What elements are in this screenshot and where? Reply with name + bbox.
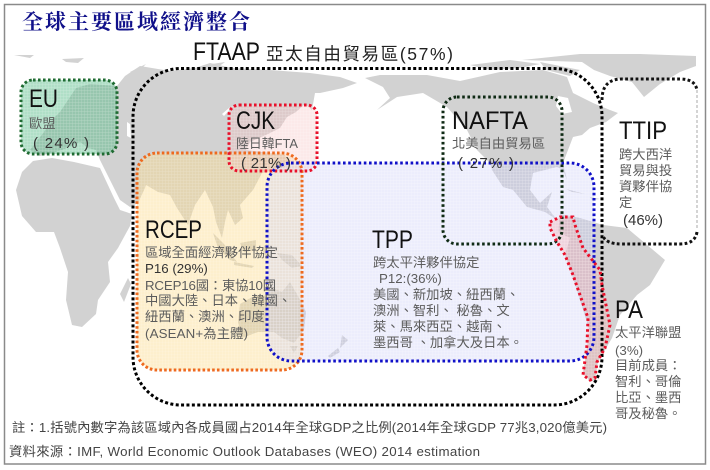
label: PA: 哥及秘魯。	[615, 406, 681, 421]
label: CJK: 陸日韓FTA	[236, 136, 298, 151]
title: 全球主要區域經濟整合	[22, 10, 250, 34]
heading: FTAAP: FTAAP	[193, 38, 260, 66]
fill: PA	[550, 217, 610, 380]
map: Southeast Asian islands	[213, 233, 302, 268]
region fills	[21, 80, 610, 380]
label: RCEP: P16 (29%)	[145, 261, 208, 276]
label: RCEP	[145, 216, 291, 341]
map: small arctic islands	[14, 55, 225, 74]
fill: RCEP	[137, 153, 302, 370]
label: TPP: P12:(36%)	[379, 271, 442, 286]
label: PA: 太平洋聯盟	[615, 325, 681, 340]
label: TTIP: (46%)	[623, 212, 663, 229]
region outlines	[21, 68, 697, 405]
map: Greenland	[522, 54, 696, 97]
map: North America	[365, 70, 618, 220]
label: TTIP: 貿易與投	[619, 163, 672, 178]
label: TTIP: 資夥伴協	[619, 179, 672, 194]
map: Madagascar	[120, 278, 131, 302]
label: RCEP: RCEP16國：東協10國	[145, 278, 276, 293]
outline: TTIP	[602, 79, 697, 244]
label: RCEP: 區域全面經濟夥伴協定	[145, 245, 278, 260]
label: CJK: ( 21% )	[241, 155, 291, 172]
map: Caribbean islands	[566, 189, 600, 200]
label: CJK	[236, 107, 298, 172]
label: NAFTA	[452, 107, 545, 172]
fill: EU	[21, 80, 117, 154]
label: RCEP: 紐西蘭、澳洲、印度	[145, 309, 265, 324]
label: TPP: 美國、新加坡、紐西蘭、	[373, 287, 519, 302]
label: EU: ( 24% )	[33, 135, 89, 152]
label: RCEP: RCEP	[145, 216, 202, 244]
map: inland lakes and seas	[127, 106, 233, 138]
fill: CJK	[229, 105, 317, 171]
label: TTIP: 跨大西洋	[619, 147, 672, 162]
outline: PA	[550, 217, 610, 380]
label: TPP: 萊、馬來西亞、越南、	[373, 319, 506, 334]
outline: NAFTA	[443, 97, 562, 244]
label: PA: PA	[615, 296, 643, 324]
map: Eurasia	[30, 63, 357, 238]
label: CJK: CJK	[236, 107, 275, 135]
map: Arctic Canada	[470, 60, 580, 76]
label: NAFTA: ( 27% )	[458, 155, 514, 172]
label: EU	[29, 85, 89, 152]
label: TPP: TPP	[372, 226, 413, 254]
outline: FTAAP	[133, 68, 602, 405]
label: TPP: 澳洲、智利、 秘魯、文	[373, 303, 510, 318]
label: EU: 歐盟	[29, 116, 56, 131]
label: EU: EU	[29, 85, 58, 113]
source: 資料來源：IMF, World Economic Outlook Databases (WEO) 2014 estimation	[9, 444, 480, 459]
map: Australia	[238, 282, 306, 343]
map: Hudson Bay	[556, 96, 572, 114]
label: PA: 比亞、墨西	[615, 390, 681, 405]
label: TPP: 墨西哥 、加拿大及日本。	[373, 334, 523, 350]
label: PA: (3%)	[615, 343, 643, 358]
heading: FTAAP	[193, 38, 453, 66]
label: TTIP	[619, 117, 672, 229]
label: TTIP: TTIP	[619, 117, 667, 145]
label: PA	[615, 296, 681, 421]
label: TTIP: 定	[619, 195, 632, 210]
map: Tasmania and New Zealand	[290, 335, 348, 358]
label: RCEP: 中國大陸、日本、韓國、	[145, 293, 291, 308]
fill: TPP	[267, 163, 594, 361]
outline: TPP	[267, 163, 594, 361]
label: RCEP: (ASEAN+為主體)	[145, 326, 248, 341]
outline: RCEP	[137, 153, 302, 370]
map: Africa	[16, 158, 132, 327]
heading: FTAAP: 亞太自由貿易區(57%)	[266, 44, 453, 64]
world map	[14, 54, 696, 382]
footnote: 註：1.括號內數字為該區域內各成員國占2014年全球GDP之比例(2014年全球GDP 77兆3,020億美元)	[12, 420, 607, 435]
label: TPP: 跨太平洋夥伴協定	[373, 255, 479, 270]
outline: EU	[21, 80, 117, 154]
label: PA: 目前成員：	[615, 357, 681, 373]
label: NAFTA: NAFTA	[452, 107, 528, 135]
outline: CJK	[229, 105, 317, 171]
label: TPP	[372, 226, 523, 350]
label: NAFTA: 北美自由貿易區	[452, 136, 545, 151]
map: South America	[558, 214, 665, 382]
label: PA: 智利、哥倫	[615, 374, 681, 389]
